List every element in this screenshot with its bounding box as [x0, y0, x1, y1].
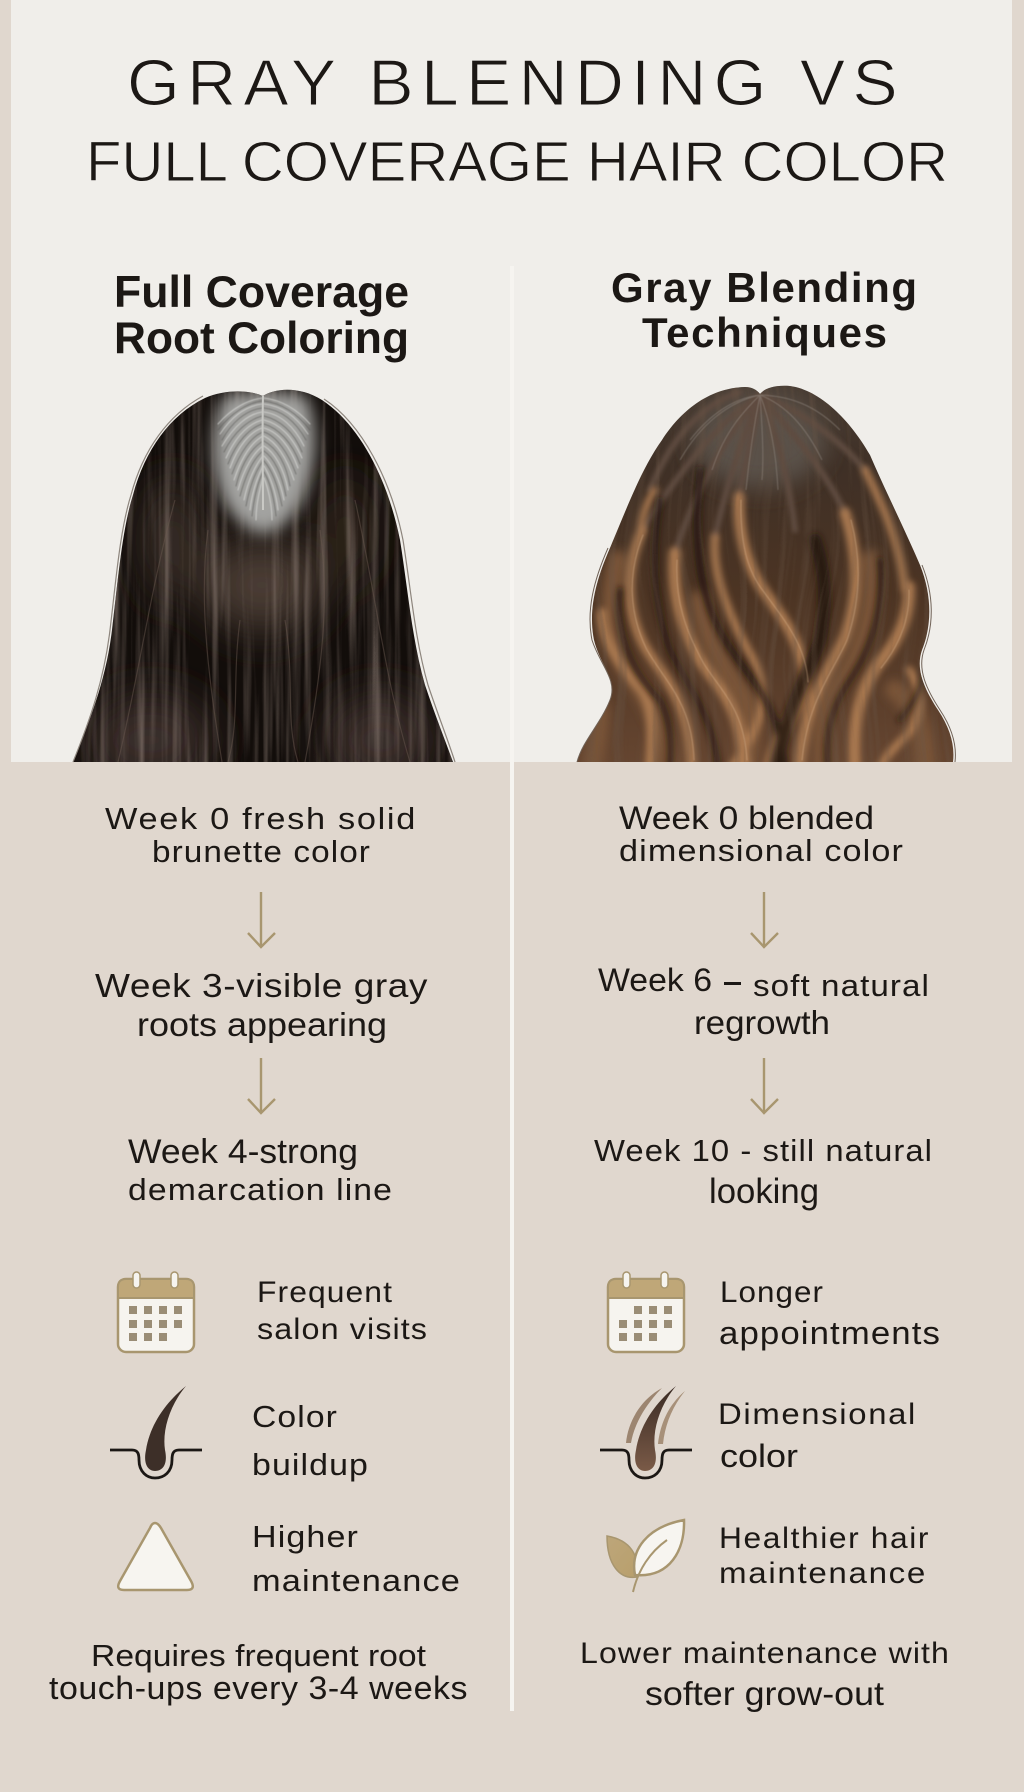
label: longer appointments: Longer [720, 1276, 824, 1309]
arrow down [751, 1058, 778, 1113]
column heading: gray blending [611, 264, 917, 356]
column heading: gray blending: Gray Blending [611, 264, 917, 311]
center divider [510, 266, 514, 1711]
scalp part line [262, 396, 264, 510]
left summary [49, 1638, 468, 1706]
right benefit rows [600, 1272, 941, 1592]
icon: triangle [118, 1523, 193, 1590]
hair illustration: solid dark hair with gray roots [72, 390, 456, 762]
icon: calendar [608, 1272, 684, 1352]
gray root patch [213, 392, 315, 534]
left benefit rows [110, 1272, 461, 1598]
column heading: full coverage [114, 268, 409, 363]
title: GRAY BLENDING VS [127, 46, 905, 119]
step: week 6: Week 6 [598, 962, 712, 998]
arrow down [248, 892, 275, 947]
right summary [580, 1637, 950, 1712]
stray outline hairs [73, 396, 455, 762]
label: frequent salon visits: Frequent [257, 1276, 393, 1309]
label: healthier hair maintenance: Healthier hair [719, 1522, 930, 1555]
step: week 4: demarcation line [128, 1172, 393, 1207]
dark lowlight strands [619, 470, 935, 770]
icon: hair follicle dark [110, 1386, 202, 1478]
arrow down [248, 1058, 275, 1113]
left summary: touch-ups every 3-4 weeks [49, 1670, 468, 1706]
step: week 0: Week 0 blended [619, 800, 874, 836]
mid brown fan from the part [642, 392, 865, 553]
step: week 0: dimensional color [619, 833, 904, 868]
step: week 3: Week 3-visible gray [95, 968, 428, 1005]
step: week 0: Week 0 fresh solid [105, 801, 417, 836]
step: week 0 [105, 801, 417, 869]
icon: hair follicle dimensional [600, 1386, 692, 1478]
step: week 3: roots appearing [137, 1007, 387, 1044]
label: higher maintenance: maintenance [252, 1563, 461, 1598]
title [86, 46, 948, 194]
icon: calendar [118, 1272, 194, 1352]
step: week 6: regrowth [694, 1004, 830, 1041]
stray outline hairs [577, 548, 955, 762]
step: week 10: looking [709, 1172, 819, 1211]
step: week 10: Week 10 - still natural [594, 1133, 933, 1168]
column heading: full coverage: Full Coverage [114, 268, 409, 317]
label: color buildup [252, 1399, 369, 1482]
step: week 4: Week 4-strong [128, 1133, 358, 1171]
step: week 0 [619, 800, 904, 868]
label: frequent salon visits [257, 1276, 428, 1346]
label: higher maintenance [252, 1519, 461, 1598]
right summary: Lower maintenance with [580, 1637, 950, 1670]
label: color buildup: buildup [252, 1447, 369, 1482]
fine light strands [632, 500, 909, 760]
arrow down [751, 892, 778, 947]
label: longer appointments: appointments [719, 1315, 941, 1351]
step: week 4 [128, 1133, 393, 1207]
fine strand texture [81, 390, 452, 762]
step: week 0: brunette color [152, 834, 371, 869]
column heading: full coverage: Root Coloring [114, 314, 409, 363]
column heading: gray blending: Techniques [642, 309, 887, 356]
label: frequent salon visits: salon visits [257, 1313, 428, 1346]
right timeline [594, 800, 933, 1211]
left timeline [95, 801, 428, 1207]
label: color buildup: Color [252, 1399, 338, 1434]
label: dimensional color: Dimensional [718, 1398, 917, 1431]
label: higher maintenance: Higher [252, 1519, 359, 1554]
warm wavy highlights [602, 470, 920, 770]
gray root strands [218, 398, 310, 520]
step: week 6: soft natural [753, 968, 930, 1003]
gray-brown root tone [694, 392, 826, 488]
label: healthier hair maintenance: maintenance [719, 1557, 927, 1590]
right summary: softer grow-out [645, 1675, 884, 1712]
step: week 3 [95, 968, 428, 1044]
gray blended root strands [680, 395, 840, 490]
left summary: Requires frequent root [91, 1638, 426, 1673]
top light panel [11, 0, 1012, 762]
soft brown shine [88, 475, 435, 785]
title: FULL COVERAGE HAIR COLOR [86, 130, 948, 194]
label: dimensional color: color [720, 1438, 798, 1474]
wavy fine strand texture [598, 386, 928, 762]
label: healthier hair maintenance [719, 1522, 930, 1590]
hair illustration: blended dimensional waves [576, 386, 956, 762]
step: week 10 [594, 1133, 933, 1211]
label: longer appointments [719, 1276, 941, 1351]
icon: leaves [607, 1520, 684, 1592]
mid brown body flow [592, 560, 925, 770]
step: week 6 [598, 962, 930, 1041]
label: dimensional color [718, 1398, 917, 1474]
long strand highlights [118, 500, 410, 762]
